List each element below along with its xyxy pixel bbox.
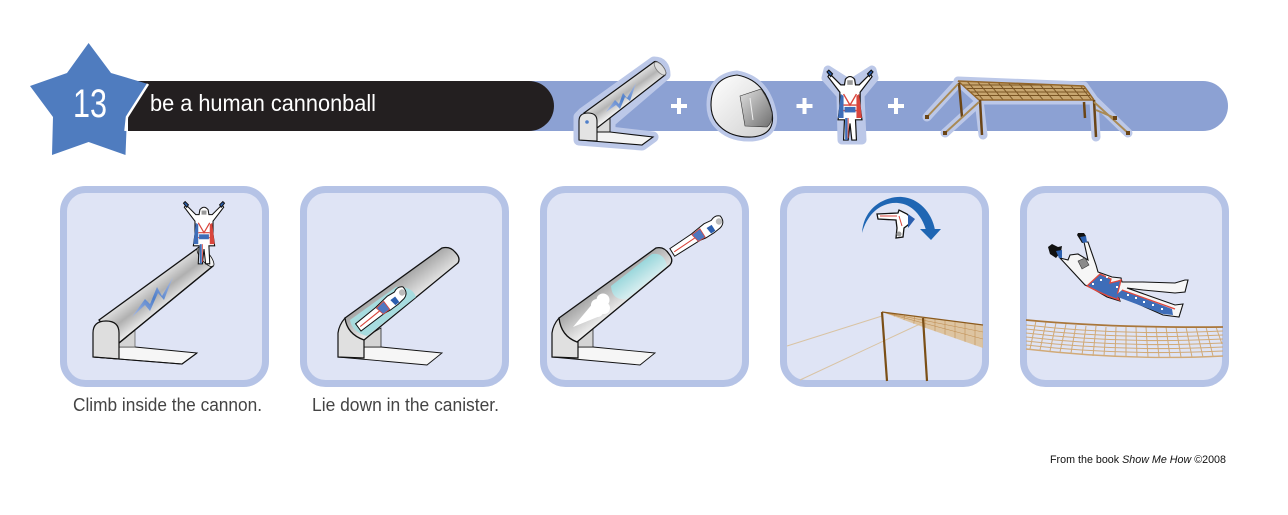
cannon post	[578, 328, 593, 347]
star number: 13	[73, 82, 107, 126]
icon: helmet	[711, 75, 773, 137]
cannon foot	[552, 347, 655, 365]
cannon base	[552, 318, 578, 358]
cannon foot	[93, 347, 197, 364]
plus	[796, 98, 812, 114]
title pill	[128, 81, 554, 131]
suit	[1087, 274, 1121, 300]
net side view	[882, 312, 983, 350]
gloves	[1048, 244, 1062, 258]
rotation arrow	[862, 197, 941, 240]
barrel	[345, 248, 459, 340]
plus	[888, 98, 904, 114]
panel: land in the net	[1024, 190, 1226, 384]
star badge	[30, 43, 148, 155]
cannon post	[119, 322, 135, 347]
cannon foot	[338, 347, 442, 365]
figure standing in cannon	[184, 202, 224, 264]
panel: somersault	[784, 190, 986, 384]
barrel	[559, 248, 672, 342]
helmet visor	[1078, 258, 1089, 269]
lightning bolt	[132, 277, 173, 317]
guy ropes	[787, 316, 920, 380]
net	[1026, 321, 1223, 357]
header bar	[128, 81, 1228, 131]
net poles	[882, 312, 927, 381]
credit: From the book Show Me How ©2008	[1050, 454, 1226, 466]
cannon base	[338, 318, 364, 358]
tumbling figure	[877, 210, 915, 238]
icon: daredevil	[826, 70, 874, 140]
net top rope	[1026, 320, 1223, 327]
cannon barrel	[99, 248, 213, 343]
caption 2: Lie down in the canister.	[312, 395, 499, 415]
falling figure	[1048, 233, 1188, 317]
barrel opening	[194, 245, 217, 269]
cannon post	[364, 328, 381, 347]
plus	[671, 98, 687, 114]
icon: cannon	[579, 60, 668, 145]
body	[1060, 242, 1188, 317]
cannon breech	[93, 321, 119, 359]
title: be a human cannonball	[150, 90, 376, 116]
panel: climb inside the cannon	[64, 190, 266, 384]
teal canister	[611, 254, 667, 299]
icon: safety net	[925, 80, 1130, 137]
flying figure	[668, 214, 726, 257]
teal canister	[350, 287, 416, 336]
lying figure	[354, 285, 410, 332]
panel: fired from cannon	[544, 190, 746, 384]
panel: lie down in the canister	[304, 190, 506, 384]
explosion	[573, 294, 610, 327]
caption 1: Climb inside the cannon.	[73, 395, 262, 415]
